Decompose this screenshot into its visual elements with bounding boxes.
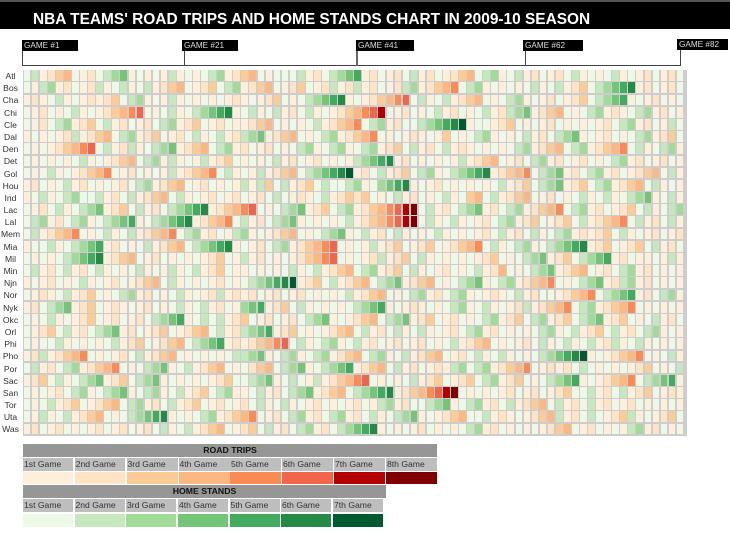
row: San bbox=[23, 387, 687, 399]
text: Pho bbox=[3, 351, 18, 361]
game timeline bbox=[22, 39, 728, 66]
row: Min bbox=[23, 265, 687, 277]
label: game 82: GAME #82 bbox=[679, 40, 719, 49]
legend: road trips: 5th Game bbox=[231, 459, 269, 469]
text: Uta bbox=[4, 412, 17, 422]
row: Was bbox=[23, 423, 687, 436]
legend: home stands: 7th Game bbox=[334, 500, 372, 510]
row: Njn bbox=[23, 277, 687, 289]
text: Det bbox=[4, 156, 17, 166]
label: game 1: GAME #1 bbox=[24, 41, 60, 50]
label: game 62 bbox=[523, 40, 583, 51]
text: Cha bbox=[3, 95, 18, 105]
text: Cle bbox=[4, 120, 17, 130]
row: Mia bbox=[23, 241, 687, 253]
legend: home stands: 5th Game bbox=[230, 500, 268, 510]
row: Dal bbox=[23, 131, 687, 143]
legend: road trips: 7th Game bbox=[335, 459, 373, 469]
row: Lac bbox=[23, 204, 687, 216]
text: San bbox=[3, 388, 18, 398]
legend: home stands bbox=[23, 485, 386, 527]
text: Den bbox=[3, 144, 18, 154]
row: Lal bbox=[23, 216, 687, 228]
row: Cle bbox=[23, 119, 687, 131]
legend: home stands: 2nd Game bbox=[76, 500, 116, 510]
text: Mil bbox=[5, 254, 16, 264]
text: Was bbox=[2, 424, 19, 434]
label: game 41: GAME #41 bbox=[358, 41, 398, 50]
text: Lal bbox=[5, 217, 16, 227]
legend: home stands: 6th Game bbox=[282, 500, 320, 510]
text: Nyk bbox=[3, 303, 18, 313]
legend: road trips: 8th Game bbox=[387, 459, 425, 469]
row: Bos bbox=[23, 82, 687, 94]
row: Okc bbox=[23, 314, 687, 326]
label: game 62: GAME #62 bbox=[525, 41, 565, 50]
legend: home stands: 1st Game bbox=[24, 500, 61, 510]
row: Det bbox=[23, 155, 687, 168]
label: game 21 bbox=[182, 40, 238, 51]
text: Gol bbox=[4, 168, 17, 178]
row: Mil bbox=[23, 253, 687, 265]
text: Tor bbox=[5, 400, 16, 410]
heatmap chart bbox=[1, 70, 687, 436]
text: Orl bbox=[5, 327, 16, 337]
legend: road trips: 3rd Game bbox=[128, 459, 166, 469]
text: Mia bbox=[4, 242, 17, 252]
legend: road trips: 4th Game bbox=[180, 459, 217, 469]
row: Orl bbox=[23, 326, 687, 338]
text: Min bbox=[4, 266, 17, 276]
text: Chi bbox=[4, 108, 17, 118]
text: Nor bbox=[4, 290, 17, 300]
text: Dal bbox=[4, 132, 17, 142]
title: NBA TEAMS' ROAD TRIPS AND HOME STANDS CHART IN 2009-10 SEASON bbox=[33, 11, 590, 28]
legend heading: home stands: HOME STANDS bbox=[173, 486, 236, 496]
label: game 41 bbox=[356, 40, 414, 51]
text: Por bbox=[4, 364, 17, 374]
row: Hou bbox=[23, 180, 687, 192]
legend heading: road trips: ROAD TRIPS bbox=[203, 445, 257, 455]
legend: road trips bbox=[23, 444, 437, 484]
row: Mem bbox=[23, 228, 687, 241]
text: Ind bbox=[5, 193, 16, 203]
text: Bos bbox=[3, 83, 18, 93]
legend: road trips: 1st Game bbox=[24, 459, 61, 469]
row: Cha bbox=[23, 94, 687, 107]
label: game 82 bbox=[677, 39, 728, 50]
text: Sac bbox=[3, 376, 18, 386]
row: Pho bbox=[23, 350, 687, 362]
row: Uta bbox=[23, 411, 687, 423]
text: Phi bbox=[4, 339, 17, 349]
row: Gol bbox=[23, 168, 687, 180]
legend heading: home stands bbox=[23, 485, 386, 498]
row: Tor bbox=[23, 399, 687, 411]
row: Ind bbox=[23, 192, 687, 204]
row: Chi bbox=[23, 107, 687, 119]
legend: road trips: 6th Game bbox=[283, 459, 321, 469]
title bbox=[0, 0, 730, 29]
legend: home stands: 4th Game bbox=[179, 500, 217, 510]
row: Nor bbox=[23, 289, 687, 302]
text: Atl bbox=[5, 71, 16, 81]
row: Phi bbox=[23, 338, 687, 350]
row: Atl bbox=[23, 70, 687, 82]
text: Hou bbox=[3, 181, 18, 191]
legend: road trips: 2nd Game bbox=[76, 459, 116, 469]
text: Mem bbox=[1, 229, 20, 239]
legend: home stands: 3rd Game bbox=[127, 500, 165, 510]
text: Lac bbox=[4, 205, 17, 215]
row: Nyk bbox=[23, 302, 687, 314]
text: Njn bbox=[4, 278, 17, 288]
label: game 21: GAME #21 bbox=[184, 41, 224, 50]
row: Den bbox=[23, 143, 687, 155]
legend heading: road trips bbox=[23, 444, 437, 457]
text: Okc bbox=[3, 315, 18, 325]
row: Sac bbox=[23, 375, 687, 387]
label: game 1 bbox=[22, 40, 78, 51]
row: Por bbox=[23, 362, 687, 375]
